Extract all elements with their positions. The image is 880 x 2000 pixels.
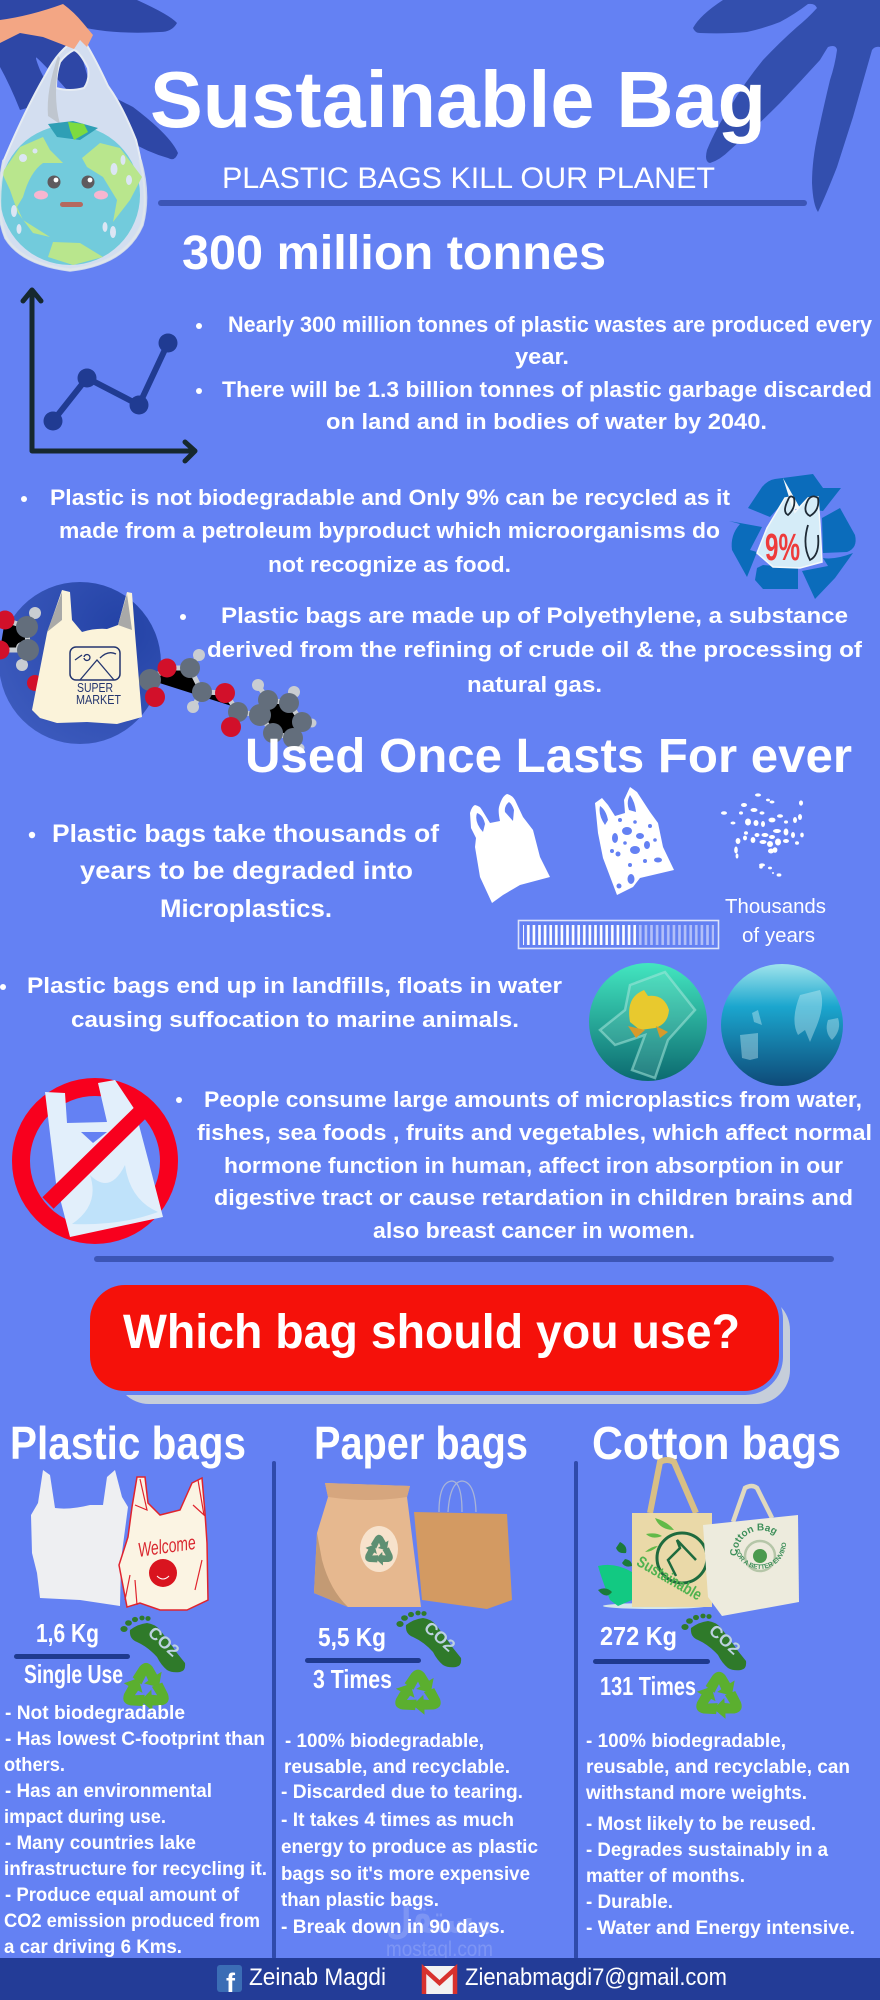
- heading: 300 million tonnes: 300 million tonnes: [182, 227, 606, 280]
- icon: no plastic bags sign: [21, 1080, 169, 1237]
- kraft shopping bag: [414, 1481, 512, 1609]
- column: paper bags: [281, 1417, 538, 1938]
- list: plastic properties: - Has an environmental: [5, 1780, 212, 1802]
- footer bar: [0, 1958, 880, 2000]
- subtitle: PLASTIC BAGS KILL OUR PLANET: [222, 162, 715, 195]
- usage label: 3 Times: [313, 1664, 392, 1694]
- label: thousands of years: of years: [742, 925, 815, 947]
- list: paper properties: reusable, and recyclable.: [284, 1756, 510, 1778]
- text block: marine animals: causing suffocation to marine animals.: [71, 1007, 519, 1032]
- heading: Cotton bags: [592, 1417, 841, 1469]
- blue circle: [0, 582, 161, 744]
- list: paper properties: [281, 1730, 538, 1938]
- email address: Zienabmagdi7@gmail.com: [465, 1964, 727, 1991]
- sustainable cotton bag: Sustainable: [634, 1553, 704, 1604]
- list: paper properties: bags so it's more expensive: [281, 1863, 530, 1885]
- list: cotton properties: withstand more weights.: [585, 1782, 807, 1804]
- list: plastic properties: [4, 1702, 267, 1958]
- watermark: [386, 1898, 493, 1961]
- globe face: [34, 176, 108, 207]
- list: plastic properties: - Many countries lake: [5, 1832, 196, 1854]
- text block: thousands of years to degrade: years to be degraded into: [80, 857, 413, 885]
- facebook name: Zeinab Magdi: [249, 1964, 386, 1991]
- text block: marine animals: [0, 973, 562, 1032]
- globe continents: [2, 137, 142, 265]
- usage label: Single Use: [24, 1659, 123, 1689]
- icon: CO2 footprint: CO2: [144, 1623, 183, 1661]
- text block: marine animals: Plastic bags end up in landfills, floats in water: [27, 973, 562, 998]
- list: paper properties: - It takes 4 times as much: [281, 1809, 514, 1831]
- list: cotton properties: - Most likely to be reused.: [586, 1813, 816, 1835]
- list: paper properties: than plastic bags.: [281, 1889, 439, 1911]
- molecule: [0, 613, 312, 748]
- button: which bag should you use: Which bag should you use?: [123, 1306, 740, 1359]
- progress bar: thousands of years: [518, 920, 718, 948]
- decorative leaf: top left: [0, 0, 178, 159]
- rule under weight: [14, 1654, 130, 1659]
- weight value: 1,6 Kg: [36, 1618, 99, 1648]
- icon: whole white bag: [470, 794, 550, 903]
- illustration: molecule and supermarket bag: [0, 582, 316, 752]
- icon: CO2 footprint: [396, 1611, 461, 1667]
- icon: facebook: f: [226, 1968, 236, 1998]
- globe top cap: [48, 121, 98, 140]
- icon: CO2 footprint: [681, 1614, 746, 1670]
- bag logo: MARKET: [76, 692, 121, 707]
- list: cotton properties: - Water and Energy intensive.: [586, 1917, 855, 1939]
- list: plastic properties: - Not biodegradable: [5, 1702, 185, 1724]
- icon: recycling symbol with 9% bag: 9%: [765, 527, 800, 569]
- icon: degrading bag: [595, 787, 674, 895]
- text block: health effects: digestive tract or cause retardation in children brains and: [214, 1185, 853, 1210]
- text block: not biodegradable: made from a petroleum byproduct which microorganisms do: [59, 518, 720, 543]
- icon: green recycle: [689, 1672, 748, 1723]
- label: thousands of years: [725, 896, 826, 947]
- list: cotton properties: reusable, and recyclable, can: [586, 1756, 850, 1778]
- green leaves: [598, 1542, 707, 1609]
- text block: health effects: People consume large amounts of microplastics from water,: [204, 1087, 862, 1112]
- transparent bag: [0, 38, 145, 270]
- heading: Plastic bags: [10, 1417, 246, 1469]
- welcome plastic bag: [119, 1477, 208, 1610]
- list: paper properties: - Discarded due to tearing.: [281, 1781, 523, 1803]
- weight value: 272 Kg: [600, 1621, 677, 1651]
- text block: health effects: hormone function in human, affect iron absorption in our: [224, 1153, 843, 1178]
- label: thousands of years: Thousands: [725, 896, 826, 918]
- bag logo: [70, 647, 121, 707]
- icon: green recycle: [116, 1663, 175, 1715]
- sustainable cotton bag: [632, 1460, 712, 1607]
- list: plastic properties: others.: [4, 1754, 65, 1776]
- cream cotton bag: FOR A BETTER ENVIRONMENT: [735, 1542, 786, 1569]
- globe: [0, 125, 140, 265]
- cream cotton bag: [703, 1484, 799, 1616]
- weight value: 5,5 Kg: [318, 1622, 386, 1652]
- text block: health effects: [176, 1087, 872, 1243]
- text block: plastic waste production: Nearly 300 million tonnes of plastic wastes are produced every: [228, 312, 873, 337]
- watermark: مستقل: [386, 1898, 493, 1942]
- photo: bags floating in ocean: [721, 964, 843, 1086]
- list: cotton properties: - 100% biodegradable,: [586, 1730, 786, 1752]
- list: paper properties: - Break down in 90 days.: [281, 1916, 505, 1938]
- rule under weight: [593, 1659, 710, 1664]
- icon: CO2 footprint: CO2: [420, 1618, 459, 1656]
- bag inner fold: [48, 56, 60, 124]
- watermark: mostaql.com: [386, 1938, 493, 1961]
- text block: polyethylene: [180, 603, 863, 697]
- text block: plastic waste production: There will be 1.3 billion tonnes of plastic garbage discarded: [222, 377, 872, 402]
- list: paper properties: energy to produce as plastic: [281, 1836, 538, 1858]
- brown paper bag: [314, 1483, 421, 1607]
- list: plastic properties: - Produce equal amount of: [5, 1884, 239, 1906]
- list: cotton properties: matter of months.: [586, 1865, 745, 1887]
- heading: Paper bags: [314, 1417, 528, 1469]
- illustration: hand holding plastic bag with crying earth: [0, 4, 146, 270]
- text block: not biodegradable: Plastic is not biodegradable and Only 9% can be recycled as it: [50, 485, 731, 510]
- list: paper properties: - 100% biodegradable,: [285, 1730, 484, 1752]
- cream bag: [32, 590, 142, 724]
- tear drops: [11, 148, 132, 238]
- text block: thousands of years to degrade: [29, 820, 440, 923]
- photo: fish trapped in bag: [589, 963, 707, 1081]
- bag logo: SUPER: [77, 680, 113, 695]
- text block: health effects: fishes, sea foods , fruits and vegetables, which affect normal: [197, 1120, 872, 1145]
- list: plastic properties: CO2 emission produced from: [4, 1910, 260, 1932]
- list: plastic properties: - Has lowest C-footprint than: [5, 1728, 265, 1750]
- text block: not biodegradable: [21, 485, 731, 577]
- icon: scattered microplastics: [721, 793, 804, 877]
- text block: polyethylene: natural gas.: [467, 672, 602, 697]
- text block: polyethylene: Plastic bags are made up of Polyethylene, a substance: [221, 603, 848, 628]
- list: cotton properties: [585, 1730, 855, 1939]
- line chart icon: [23, 290, 195, 461]
- text block: plastic waste production: on land and in bodies of water by 2040.: [326, 409, 767, 434]
- list: plastic properties: a car driving 6 Kms.: [4, 1936, 182, 1958]
- icon: recycling symbol with 9% bag: [729, 474, 856, 599]
- list: cotton properties: - Durable.: [586, 1891, 673, 1913]
- bag rim: [0, 160, 146, 270]
- text block: polyethylene: derived from the refining of crude oil & the processing of: [207, 637, 863, 662]
- button: which bag should you use: [86, 1281, 790, 1404]
- title: Sustainable Bag: [150, 55, 766, 144]
- column: plastic bags: [4, 1417, 267, 1958]
- icon: facebook: [217, 1965, 242, 1998]
- rule under weight: [305, 1658, 421, 1663]
- text block: not biodegradable: not recognize as food.: [268, 552, 511, 577]
- hand: [0, 4, 93, 49]
- list: plastic properties: impact during use.: [4, 1806, 166, 1828]
- heading: used once lasts for ever: Used Once Lasts For ever: [245, 730, 852, 783]
- icon: gmail: [422, 1966, 457, 1994]
- text block: thousands of years to degrade: Plastic bags take thousands of: [52, 820, 440, 848]
- text block: thousands of years to degrade: Microplastics.: [160, 895, 332, 923]
- column divider: plastic / paper: [272, 1461, 276, 1959]
- usage label: 131 Times: [600, 1671, 696, 1701]
- white plastic bag: [31, 1470, 128, 1606]
- decorative leaf: top right: [693, 0, 880, 212]
- text block: plastic waste production: year.: [515, 344, 569, 369]
- list: plastic properties: infrastructure for recycling it.: [4, 1858, 267, 1880]
- list: cotton properties: - Degrades sustainably in a: [586, 1839, 828, 1861]
- column divider: paper / cotton: [574, 1461, 578, 1959]
- icon: green recycle: [388, 1670, 447, 1719]
- cream cotton bag: Cotton Bag: [730, 1524, 777, 1556]
- text block: plastic waste production: [196, 312, 873, 434]
- icon: CO2 footprint: CO2: [705, 1621, 744, 1659]
- welcome plastic bag: Welcome: [137, 1532, 197, 1562]
- text block: health effects: also breast cancer in women.: [373, 1218, 695, 1243]
- icon: CO2 footprint: [120, 1616, 185, 1672]
